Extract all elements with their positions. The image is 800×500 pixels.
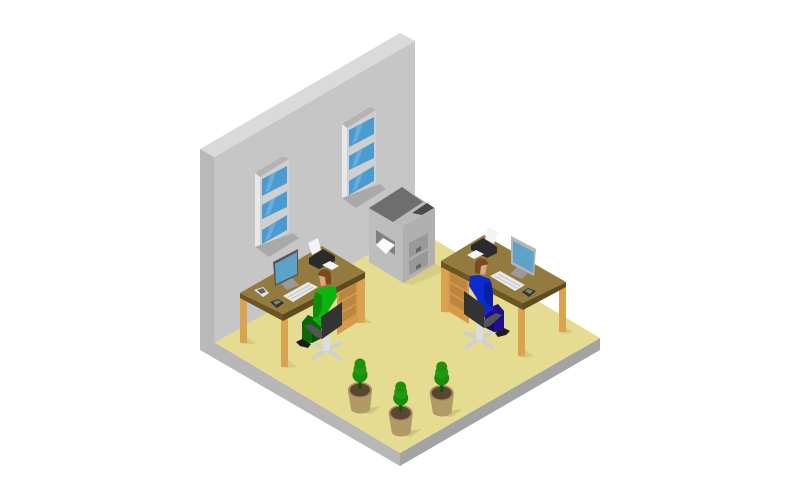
plant right: [430, 362, 463, 417]
printer: [308, 238, 339, 270]
printer: [467, 227, 498, 259]
floor slab: [200, 228, 600, 466]
worker: [469, 258, 510, 337]
keyboard: [283, 282, 318, 302]
calculator: [522, 288, 536, 297]
back wall: [200, 33, 415, 350]
desk and worker in blue: [441, 227, 573, 358]
desk with drawers: [441, 235, 573, 358]
plant centre: [389, 382, 422, 437]
window right: [342, 107, 386, 208]
monitor: [510, 236, 536, 279]
phone: [254, 287, 269, 297]
photocopier: [369, 187, 448, 285]
worker: [296, 269, 337, 348]
office chair: [464, 291, 502, 347]
keyboard: [490, 271, 525, 291]
monitor: [273, 249, 299, 290]
desk and worker in green: [240, 238, 373, 368]
window left: [255, 156, 299, 257]
desk with drawers: [240, 246, 373, 368]
office chair: [304, 302, 342, 358]
plant left: [348, 358, 381, 414]
calculator: [270, 299, 284, 308]
